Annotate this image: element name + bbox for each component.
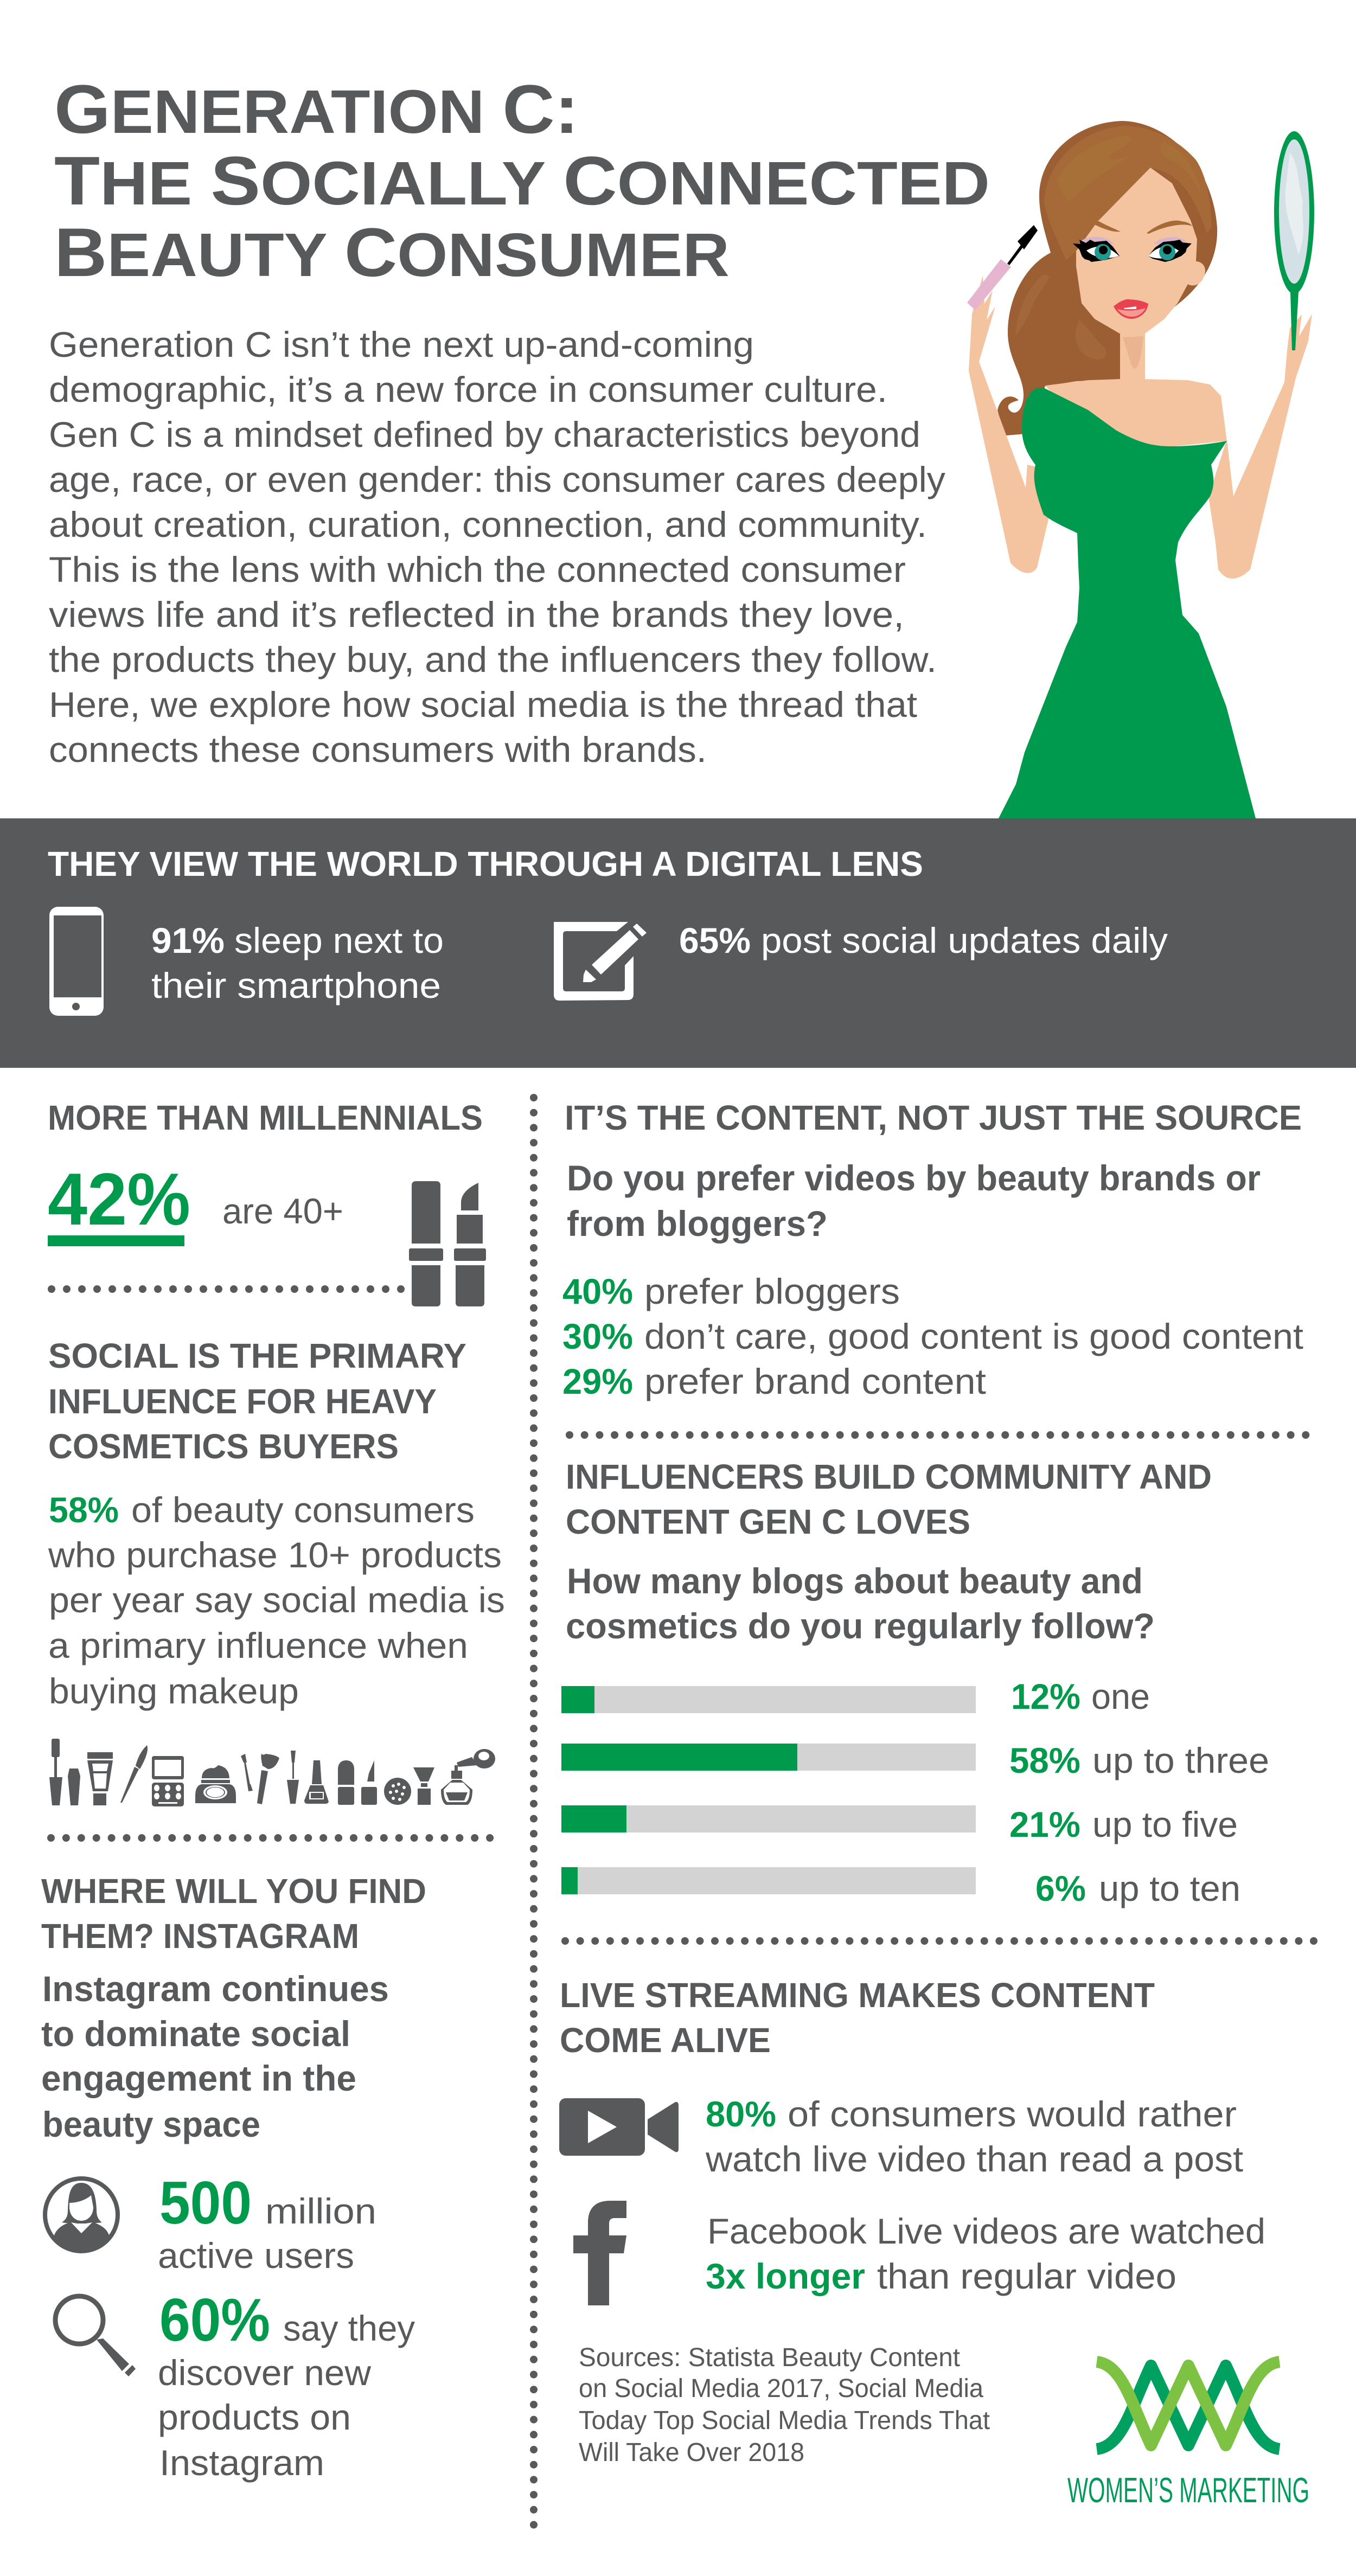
stat: 60%: discover new [158,2353,371,2393]
eyes [1073,237,1192,262]
subheading: instagram continues: Instagram continues [42,1969,389,2009]
icon: makeup brush [413,1767,434,1805]
stat: 60%: products on [158,2397,351,2437]
stat: 42% are 40+: are 40+ [222,1191,343,1231]
mascara [967,225,1038,310]
icon: facebook f [573,2201,626,2305]
intro text block [49,324,945,770]
text block: 58% [48,1490,505,1711]
stat: 80%: 80% [706,2094,776,2134]
stat: 500 million: million [265,2191,376,2231]
stat: 500 million [158,2169,376,2276]
title: THE SOCIALLY CONNECTED [54,142,990,219]
heading: live streaming [560,1976,1155,2060]
heading: where will you find them: WHERE WILL YOU FIND [41,1872,426,1911]
stat: 80%: watch live video than read a post [705,2139,1243,2179]
sources: Sources: Statista Beauty Content [579,2343,960,2372]
icon: perfume [441,1749,495,1805]
text block: 58%: 58% [49,1490,119,1530]
stat: 60%: 60% [159,2286,270,2354]
subheading: instagram continues: engagement in the [41,2058,356,2098]
bar: 21% up to five: up to five [1092,1804,1238,1844]
text block: 58%: per year say social media is [49,1580,505,1620]
title: GENERATION C: [54,71,579,148]
subheading: do you prefer: Do you prefer videos by beauty brands or [567,1158,1261,1198]
intro text block: connects these consumers with brands. [49,729,707,770]
icon: edit [554,922,647,1001]
heading: social is the primary influence [48,1336,466,1466]
sources: on Social Media 2017, Social Media [579,2374,983,2403]
bar: 6% up to ten [561,1867,1240,1908]
bar: 58% up to three: 58% [1009,1740,1080,1780]
intro text block: Generation C isn’t the next up-and-coming [49,324,754,364]
heading: social is the primary influence: SOCIAL IS THE PRIMARY [48,1336,466,1375]
subheading: instagram continues [41,1969,389,2144]
heading: digital lens: THEY VIEW THE WORLD THROUGH A DIGITAL LENS [48,844,923,883]
heading: live streaming: LIVE STREAMING MAKES CONTENT [560,1976,1155,2015]
stat: facebook live [706,2211,1265,2296]
bar: 58% up to three: up to three [1092,1740,1269,1780]
bar: 21% up to five: 21% [1009,1804,1080,1844]
intro text block: Here, we explore how social media is the thread that [49,684,917,725]
intro text block: age, race, or even gender: this consumer cares deeply [49,459,945,499]
heading: influencers: INFLUENCERS BUILD COMMUNITY AND [566,1457,1212,1496]
intro text block: Gen C is a mindset defined by characteristics beyond [49,414,920,454]
heading: where will you find them [41,1872,426,1956]
heading: influencers: CONTENT GEN C LOVES [566,1502,970,1541]
stat: 91% [151,920,444,1005]
icon: brushes [241,1751,299,1804]
face [1076,168,1205,337]
icon: palette [152,1756,184,1806]
stat: 60%: say they [283,2308,415,2348]
heading: where will you find them: THEM? INSTAGRAM [41,1917,359,1956]
subheading: instagram continues: beauty space [42,2104,260,2144]
stats: preference list: don’t care, good content is good content [644,1316,1303,1356]
icons: row of cosmetics [49,1739,495,1806]
subheading: how many blogs [566,1561,1155,1646]
left arm [969,275,1050,573]
stats: preference list: prefer brand content [644,1361,986,1401]
stat: 80%: of consumers would rather [788,2094,1237,2134]
stats: preference list: prefer bloggers [644,1271,900,1311]
lips [1114,299,1148,319]
icon: tube [87,1752,113,1805]
bar: 12% one [561,1676,1150,1716]
icon: nail polish [304,1760,329,1804]
text block: 58%: buying makeup [49,1671,299,1711]
sources [579,2343,990,2467]
stats: preference list [562,1271,1303,1401]
stats: preference list: 29% [562,1361,633,1401]
icon: cream jar [195,1765,236,1803]
stat: 91%: sleep next to [234,920,444,960]
stat: 500 million: active users [158,2235,354,2276]
stat: 60% [158,2286,415,2483]
heading: content not source: IT’S THE CONTENT, NOT JUST THE SOURCE [565,1098,1302,1137]
bar: 12% one: one [1091,1676,1150,1716]
stat: 42% are 40+: 42% [48,1158,190,1240]
subheading: instagram continues: to dominate social [41,2014,350,2054]
stats: preference list: 30% [562,1316,633,1356]
heading: live streaming: COME ALIVE [560,2021,771,2060]
icon: mascara [49,1739,80,1805]
heading: more than millennials: MORE THAN MILLENNIALS [48,1098,483,1137]
stat: 42% are 40+ [48,1158,343,1246]
icon: magnifying glass [55,2296,136,2376]
heading: social is the primary influence: INFLUENCE FOR HEAVY [48,1382,437,1421]
icon: video camera [559,2098,679,2156]
illustration: woman with mascara and mirror [967,121,1314,818]
bar chart: blogs followed [561,1676,1269,1908]
neck and shoulders [1045,331,1227,450]
text block: 58%: a primary influence when [48,1625,468,1665]
subheading: how many blogs: cosmetics do you regularly follow? [566,1606,1155,1646]
intro text block: demographic, it’s a new force in consumer culture. [49,369,887,409]
stat: facebook live: 3x longer [706,2256,865,2296]
bar: 6% up to ten: 6% [1035,1868,1086,1908]
icon: lipsticks [338,1760,377,1805]
right arm [1208,314,1312,579]
title [54,71,990,291]
intro text block: This is the lens with which the connected consumer [49,549,906,589]
stat: 60%: Instagram [159,2443,324,2483]
sources: Will Take Over 2018 [579,2438,804,2467]
intro text block: the products they buy, and the influencers they follow. [49,639,937,680]
stat: facebook live: Facebook Live videos are watched [707,2211,1265,2251]
icon: person in circle [45,2178,118,2251]
stat: 80% [705,2094,1243,2179]
text block: 58%: of beauty consumers [131,1490,475,1530]
heading: influencers [566,1457,1212,1541]
bar: 21% up to five [561,1804,1238,1844]
stat: facebook live: than regular video [877,2256,1176,2296]
dress [999,388,1256,818]
sources: Today Top Social Media Trends That [579,2406,990,2435]
icon: lipsticks [409,1181,486,1306]
title: BEAUTY CONSUMER [54,214,730,291]
icon: compact [384,1778,411,1805]
subheading: how many blogs: How many blogs about beauty and [567,1561,1143,1601]
intro text block: views life and it’s reflected in the brands they love, [49,594,904,635]
bar: 12% one: 12% [1011,1676,1080,1716]
icon: smartphone [49,907,104,1016]
logo mark [1097,2362,1280,2449]
eyebrows [1095,221,1192,234]
stat: 65%: 65% [679,920,751,960]
stat: 91%: 91% [151,920,225,960]
text block: 58%: who purchase 10+ products [48,1535,502,1575]
hair [997,121,1217,435]
subheading: do you prefer [567,1158,1261,1244]
stat: 500 million: 500 [159,2169,252,2237]
intro text block: about creation, curation, connection, and community. [49,504,927,544]
stat: 91%: their smartphone [151,965,441,1005]
heading: social is the primary influence: COSMETICS BUYERS [48,1427,399,1466]
icon: eye pencil [120,1745,148,1803]
bar: 58% up to three [561,1740,1269,1780]
subheading: do you prefer: from bloggers? [567,1203,828,1244]
panel: digital lens banner [0,818,1356,1068]
logo: women's marketing [1067,2362,1309,2510]
bar: 6% up to ten: up to ten [1099,1868,1240,1908]
mirror [1274,131,1314,350]
stats: preference list: 40% [562,1271,633,1311]
stat: 65%: post social updates daily [761,920,1168,960]
